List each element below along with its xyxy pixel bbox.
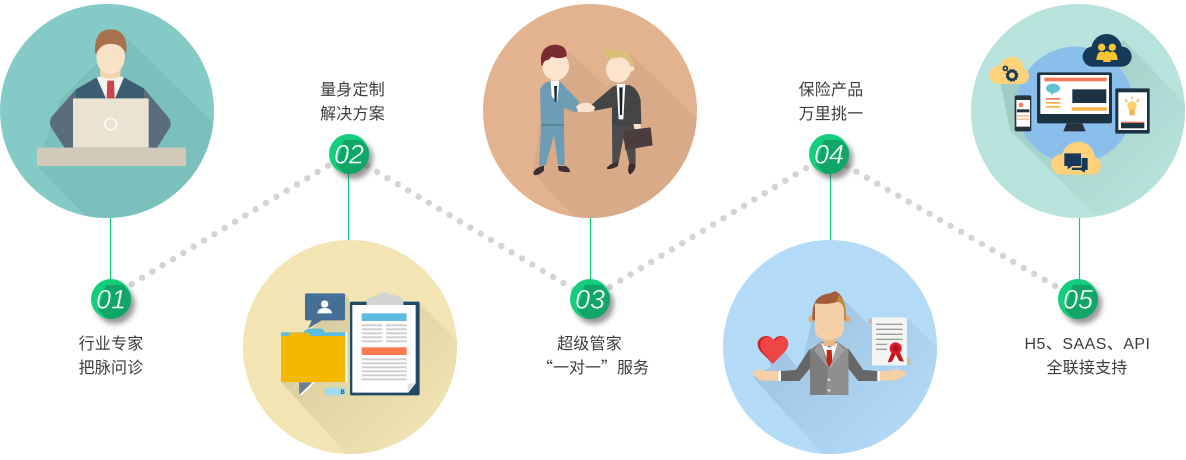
caption: step 01: 把脉问诊 [79,359,143,377]
step badge 02: 02 [334,140,364,170]
dotted connector path [132,166,1078,299]
step badge 05 [1058,279,1102,324]
step badge 04 [809,134,853,179]
icon: certificate [868,318,873,324]
caption: step 01 [79,335,143,377]
step badge 02 [329,134,373,179]
caption: step 02 [320,81,385,123]
caption: step 02: 量身定制 [320,81,385,99]
step badge 05: 05 [1063,284,1094,314]
icon: suit arms [50,88,171,148]
step badge 01: 01 [96,284,126,314]
panel: consultant at laptop [0,4,214,220]
caption: step 03: “一对一”服务 [537,354,649,378]
icon: pencil [299,382,312,395]
caption: step 03: 超级管家 [557,335,622,353]
caption: step 05 [1025,336,1150,377]
icon: phone [1015,95,1031,131]
caption: step 05: H5、SAAS、API [1025,336,1150,353]
icon: profile bubble [305,293,345,328]
connector lines [110,172,1080,282]
icon: clipboard [350,302,420,395]
icon: right man [590,47,653,175]
icon: heart [758,336,788,364]
caption: step 04: 万里挑一 [799,105,863,123]
icon: laptop [73,98,149,148]
step badge 03: 03 [575,284,605,314]
panel: documents and folder: B [340,390,345,396]
panel: documents and folder [243,240,460,460]
icon: gear cloud [989,57,1029,84]
icon: briefcase [623,127,653,150]
icon: pill label [325,388,345,395]
icon: clasped hands [576,103,595,112]
step badge 04: 04 [814,140,844,170]
caption: step 04 [799,81,863,123]
icon: chat cloud [1051,142,1101,175]
caption: step 01: 行业专家 [79,335,143,353]
step badge 01 [91,279,135,324]
caption: step 04: 保险产品 [799,81,863,99]
caption: step 02: 解决方案 [320,105,385,123]
step badge 03 [570,279,614,324]
icon: man in grey suit [752,291,907,395]
panel: advisor with heart and certificate [723,240,937,460]
icon: people cloud [1083,34,1132,67]
caption: step 03 [537,335,649,378]
desk [37,148,186,166]
icon: folder [303,329,325,333]
icon: monitor [1037,72,1112,131]
panel: handshake [483,4,697,220]
caption: step 05: 全联接支持 [1046,359,1128,377]
icon: tablet [1115,88,1150,134]
icon: left man [533,45,579,175]
panel: multi-device platform [971,4,1186,220]
